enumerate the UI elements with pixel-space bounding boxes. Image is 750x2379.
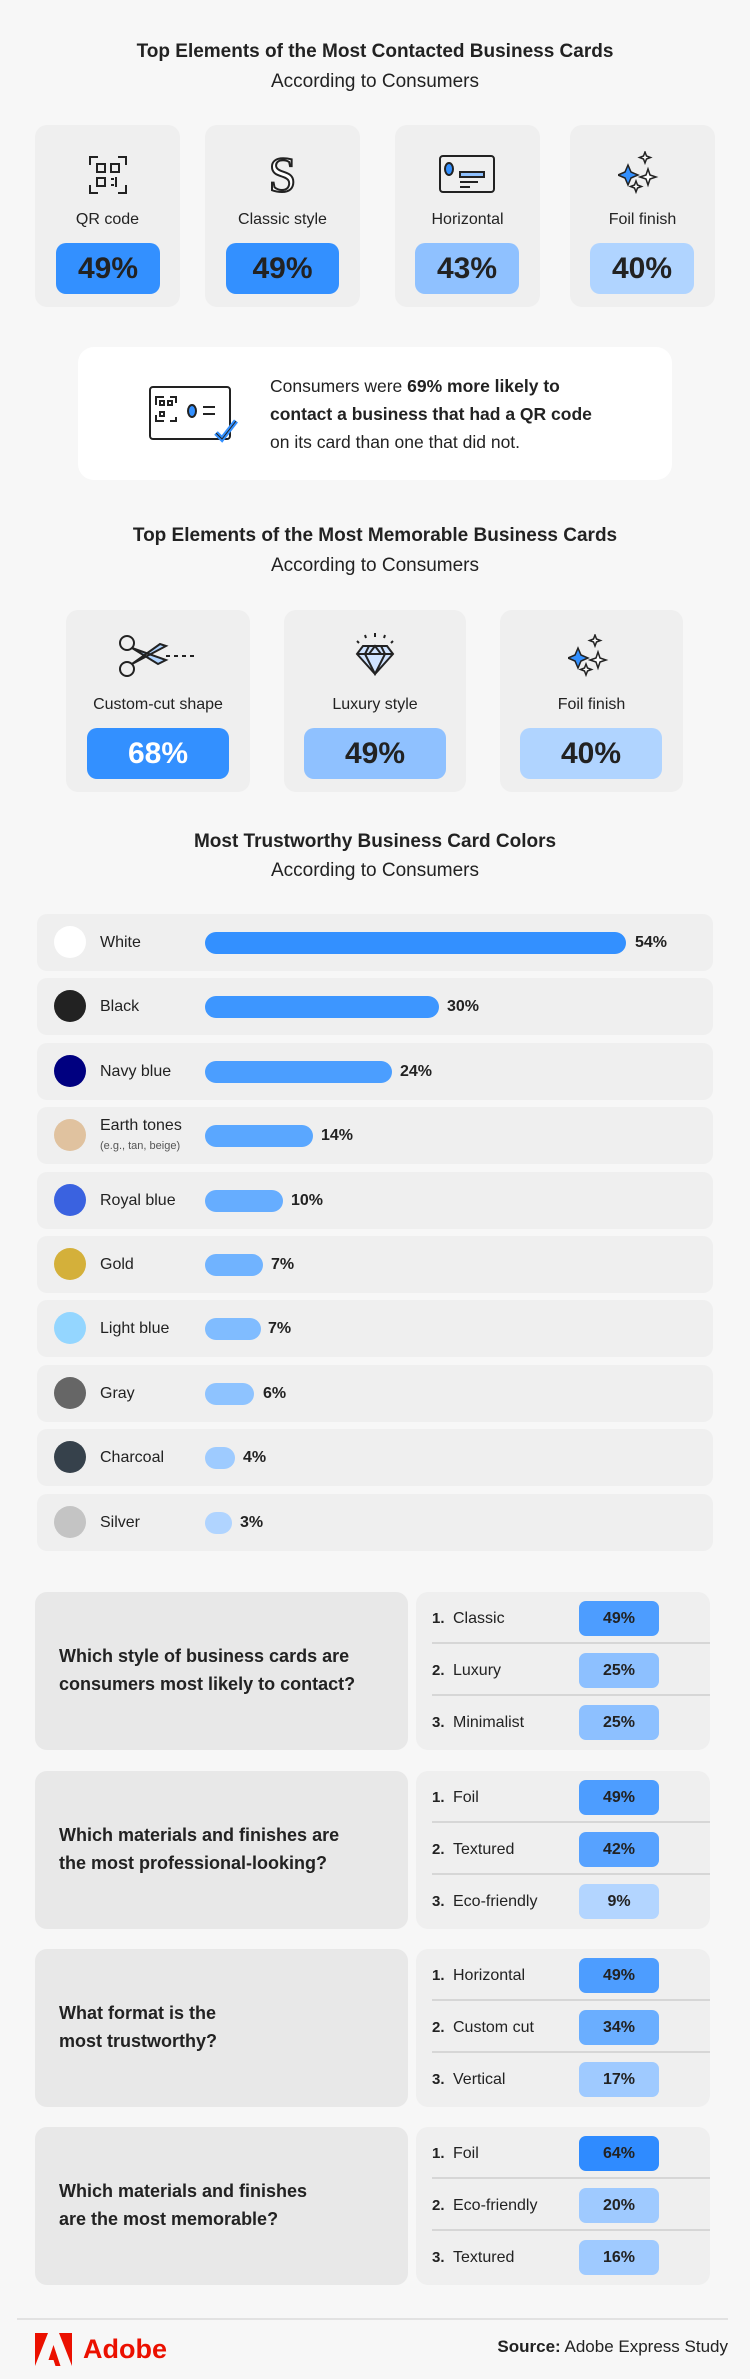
- answers: 1.: [432, 1967, 445, 1984]
- label: Foil finish: [609, 211, 676, 228]
- panel: luxury style: [284, 610, 466, 792]
- answers: 42%: [603, 1841, 635, 1858]
- question: Which materials and finishes: [59, 2181, 307, 2201]
- answers: Vertical: [453, 2071, 505, 2088]
- row: charcoal: [37, 1429, 713, 1486]
- answers: [416, 1592, 710, 1750]
- row: light blue: [37, 1300, 713, 1357]
- answers: 1.: [432, 1610, 445, 1627]
- panel: question 4: [35, 2127, 710, 2285]
- row: earth tones: (e.g., tan, beige): [100, 1140, 180, 1152]
- row: gold: [37, 1236, 713, 1293]
- panel: question 3: [35, 1949, 710, 2107]
- answers: 17%: [603, 2071, 635, 2088]
- question: Which style of business cards are: [59, 1646, 349, 1666]
- row: gray: Gray: [100, 1385, 135, 1402]
- icon: S letter: S: [269, 146, 296, 202]
- logo: Adobe: [35, 2333, 167, 2366]
- row: royal blue: [37, 1172, 713, 1229]
- answers: 2.: [432, 2019, 445, 2036]
- row: light blue: Light blue: [100, 1320, 169, 1337]
- bar chart: colors: [54, 932, 667, 1538]
- question: [35, 1949, 408, 2107]
- answers: [416, 1949, 710, 2107]
- title: most contacted: Top Elements of the Most Contacted Business Cards: [137, 41, 613, 62]
- question: consumers most likely to contact?: [59, 1674, 355, 1694]
- question: most trustworthy?: [59, 2031, 217, 2051]
- logo: Adobe: Adobe: [83, 2334, 167, 2364]
- row: gray: [37, 1365, 713, 1422]
- answers: 3.: [432, 1893, 445, 1910]
- answers: 49%: [603, 1789, 635, 1806]
- row: white: [37, 914, 713, 971]
- answers: 49%: [603, 1967, 635, 1984]
- answers: 1.: [432, 1789, 445, 1806]
- row: gold: Gold: [100, 1256, 134, 1273]
- question: Which materials and finishes are: [59, 1825, 339, 1845]
- row: silver: Silver: [100, 1514, 140, 1531]
- question: What format is the: [59, 2003, 216, 2023]
- badge: 40%: 40%: [612, 252, 672, 285]
- icon: scissors: [119, 635, 194, 677]
- text block: Consumers were 69% more likely to contact a business that had a QR code on its card than one that did not.: [270, 376, 592, 452]
- row: gold: 7%: [271, 1256, 294, 1273]
- badge: 40%: 40%: [561, 737, 621, 770]
- panel: horizontal: [395, 125, 540, 307]
- answers: 2.: [432, 1841, 445, 1858]
- answers: Luxury: [453, 1662, 501, 1679]
- badge: 68%: [87, 728, 229, 779]
- row: earth tones: [37, 1107, 713, 1164]
- answers: 20%: [603, 2197, 635, 2214]
- label: Foil finish: [558, 696, 625, 713]
- badge: 43%: [415, 243, 519, 294]
- answers: Textured: [453, 2249, 514, 2266]
- answers: Custom cut: [453, 2019, 534, 2036]
- subtitle: According to Consumers: [271, 860, 479, 881]
- row: earth tones: Earth tones: [100, 1117, 182, 1134]
- panel: question 1: [35, 1592, 710, 1750]
- icon: QR code: [89, 156, 127, 194]
- answers: 25%: [603, 1714, 635, 1731]
- answers: Textured: [453, 1841, 514, 1858]
- badge: 68%: 68%: [128, 737, 188, 770]
- source: Source: Adobe Express Study: [497, 2337, 728, 2356]
- row: white: White: [100, 934, 141, 951]
- panel: classic style: [205, 125, 360, 307]
- row: charcoal: 4%: [243, 1449, 266, 1466]
- row: light blue: 7%: [268, 1320, 291, 1337]
- badge: 49%: 49%: [252, 252, 313, 285]
- row: royal blue: Royal blue: [100, 1192, 176, 1209]
- label: QR code: [76, 211, 139, 228]
- answers: 3.: [432, 2071, 445, 2088]
- answers: 1.: [432, 2145, 445, 2162]
- answers: 2.: [432, 2197, 445, 2214]
- badge: 40%: [520, 728, 662, 779]
- row: charcoal: Charcoal: [100, 1449, 164, 1466]
- question: the most professional-looking?: [59, 1853, 327, 1873]
- badge: 49%: 49%: [78, 252, 138, 285]
- answers: 16%: [603, 2249, 635, 2266]
- icon: sparkles: [568, 634, 608, 677]
- badge: 49%: [304, 728, 446, 779]
- answers: 2.: [432, 1662, 445, 1679]
- row: royal blue: 10%: [291, 1192, 323, 1209]
- answers: 3.: [432, 1714, 445, 1731]
- icon: sparkles: [618, 151, 658, 194]
- answers: Eco-friendly: [453, 2197, 537, 2214]
- panel: question 2: [35, 1771, 710, 1929]
- question: [35, 1771, 408, 1929]
- label: Classic style: [238, 211, 327, 228]
- panel: QR code: [35, 125, 180, 307]
- panel: custom-cut shape: [66, 610, 250, 792]
- icon: horizontal card: [439, 155, 495, 193]
- icon: diamond: [356, 633, 394, 676]
- answers: [416, 1771, 710, 1929]
- answers: Eco-friendly: [453, 1893, 537, 1910]
- row: navy: 24%: [400, 1063, 432, 1080]
- row: navy: [37, 1043, 713, 1100]
- panel: foil finish 2: [500, 610, 683, 792]
- row: black: Black: [100, 998, 139, 1015]
- answers: 49%: [603, 1610, 635, 1627]
- row: navy: Navy blue: [100, 1063, 171, 1080]
- answers: 34%: [603, 2019, 635, 2036]
- answers: Foil: [453, 2145, 479, 2162]
- answers: 9%: [607, 1893, 631, 1910]
- label: Custom-cut shape: [93, 696, 223, 713]
- row: gray: 6%: [263, 1385, 286, 1402]
- question: [35, 1592, 408, 1750]
- panel: foil finish: [570, 125, 715, 307]
- badge: 43%: 43%: [437, 252, 497, 285]
- label: Horizontal: [431, 211, 504, 228]
- row: silver: 3%: [240, 1514, 263, 1531]
- label: Luxury style: [332, 696, 418, 713]
- answers: 25%: [603, 1662, 635, 1679]
- badge: 49%: [226, 243, 339, 294]
- title: trustworthy colors: Most Trustworthy Business Card Colors: [194, 831, 556, 852]
- answers: 3.: [432, 2249, 445, 2266]
- row: black: 30%: [447, 998, 479, 1015]
- answers: [416, 2127, 710, 2285]
- answers: Classic: [453, 1610, 505, 1627]
- answers: Horizontal: [453, 1967, 525, 1984]
- badge: 49%: 49%: [345, 737, 405, 770]
- question: [35, 2127, 408, 2285]
- row: black: [37, 978, 713, 1035]
- answers: Minimalist: [453, 1714, 524, 1731]
- icon: card with QR and check: [149, 386, 238, 443]
- callout: QR code stat: [78, 347, 672, 480]
- answers: Foil: [453, 1789, 479, 1806]
- title: most memorable: Top Elements of the Most Memorable Business Cards: [133, 525, 617, 546]
- answers: 64%: [603, 2145, 635, 2162]
- row: silver: [37, 1494, 713, 1551]
- badge: 49%: [56, 243, 160, 294]
- badge: 40%: [590, 243, 694, 294]
- row: white: 54%: [635, 934, 667, 951]
- row: earth tones: 14%: [321, 1127, 353, 1144]
- subtitle: According to Consumers: [271, 555, 479, 576]
- subtitle: according to consumers: According to Consumers: [271, 71, 479, 92]
- question: are the most memorable?: [59, 2209, 278, 2229]
